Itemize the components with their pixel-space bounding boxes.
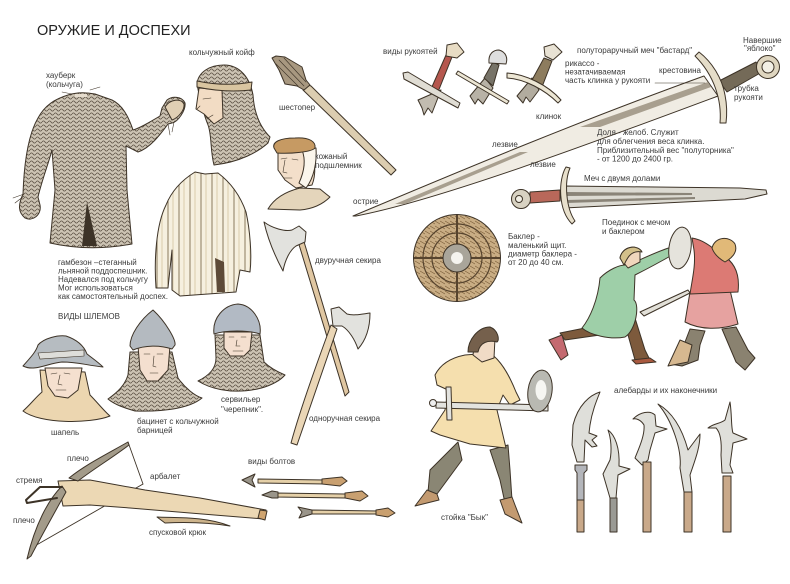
label: duel: и баклером <box>602 227 645 236</box>
heading: helmet types: ВИДЫ ШЛЕМОВ <box>58 312 120 321</box>
illustration: cervelliere with coif <box>198 304 285 391</box>
labels: bastard sword parts: полутораручный меч "бастард" <box>577 46 692 55</box>
illustration: bolts <box>242 474 395 518</box>
labels: bastard sword parts: "яблоко" <box>744 44 776 53</box>
labels: bastard sword parts: лезвие <box>492 140 518 149</box>
label: mail coif: кольчужный койф <box>189 48 255 57</box>
label: bolts: виды болтов <box>248 457 295 466</box>
label: bascinet <box>137 417 219 435</box>
title: ОРУЖИЕ И ДОСПЕХИ <box>37 23 191 39</box>
label: one-handed axe: одноручная секира <box>309 414 381 423</box>
label: bascinet: бацинет с кольчужной <box>137 417 219 426</box>
label: gambeson: Надевался под кольчугу <box>58 275 148 284</box>
illustration: crossbow <box>26 442 267 559</box>
label: halberds: алебарды и их наконечники <box>614 386 717 395</box>
label: gambeson: как самостоятельный доспех. <box>58 292 168 301</box>
illustration: hauberk mail shirt <box>13 87 185 248</box>
labels: crossbow parts: плечо <box>13 516 35 525</box>
illustration: Bull stance figure <box>415 327 555 523</box>
labels: bastard sword parts: острие <box>353 197 379 206</box>
labels: bastard sword parts: клинок <box>536 112 562 121</box>
illustration: bastard sword <box>353 52 780 216</box>
label: Bull stance: стойка "Бык" <box>441 513 488 522</box>
labels: crossbow parts <box>13 454 207 537</box>
text block: buckler <box>508 232 577 267</box>
label: duel: Поединок с мечом <box>602 218 670 227</box>
labels: bastard sword parts: крестовина <box>659 66 702 75</box>
labels: bastard sword parts: Навершие <box>743 36 782 45</box>
label: hilt types: виды рукоятей <box>383 47 438 56</box>
labels: bastard sword parts: трубка <box>734 84 759 93</box>
labels: bastard sword parts: незатачиваемая <box>565 68 625 76</box>
label: cervelliere: "черепник". <box>221 405 263 414</box>
illustration: flanged mace <box>272 56 396 175</box>
labels: crossbow parts: стремя <box>16 476 42 485</box>
label: hauberk: хауберк <box>46 71 76 80</box>
illustration: leather arming cap <box>268 138 330 210</box>
label: mace: шестопер <box>279 103 316 112</box>
text block: buckler: от 20 до 40 см. <box>508 258 563 267</box>
label: leather cap: кожаный <box>315 152 347 161</box>
labels: bastard sword parts: часть клинка у рукояти <box>565 76 650 85</box>
illustration: kettle hat <box>23 336 110 421</box>
text block: fuller description: - от 1200 до 2400 гр. <box>597 154 673 164</box>
text block: buckler: Баклер - <box>508 232 540 241</box>
illustration: bascinet with aventail <box>108 310 202 411</box>
illustration: mail coif <box>196 65 270 165</box>
label: kettle hat: шапель <box>51 428 79 437</box>
illustration: two-handed axe <box>264 222 349 396</box>
labels: bastard sword parts <box>353 36 782 206</box>
illustration: halberds <box>572 392 747 532</box>
label: duel <box>602 218 670 236</box>
labels: crossbow parts: арбалет <box>150 472 181 481</box>
labels: bastard sword parts: рукояти <box>734 93 763 102</box>
label: gambeson: гамбезон –стеганный <box>58 258 137 267</box>
label: cervelliere: сервильер <box>221 395 261 404</box>
label: leather cap: подшлемник <box>315 161 362 170</box>
labels: bastard sword parts: лезвие <box>530 160 556 169</box>
label: sword with two fullers: Меч с двумя долами <box>584 174 660 183</box>
labels: crossbow parts: плечо <box>67 454 89 463</box>
illustration: gambeson <box>155 172 251 296</box>
text block: buckler: диаметр баклера - <box>508 250 577 258</box>
label: two-handed axe: двуручная секира <box>315 256 381 265</box>
illustration: buckler <box>414 214 500 302</box>
text block: fuller description: для облегчения веса клинка. <box>597 137 704 146</box>
label: leather cap <box>315 152 362 170</box>
labels: bastard sword parts: рикассо - <box>565 59 600 68</box>
labels: crossbow parts: спусковой крюк <box>149 528 207 537</box>
text block: fuller description: Приблизительный вес "полуторника" <box>597 146 734 155</box>
text block: fuller description <box>597 128 734 164</box>
label: hauberk: (кольчуга) <box>46 80 83 89</box>
text block: buckler: маленький щит. <box>508 241 566 250</box>
label: gambeson <box>58 258 168 301</box>
label: gambeson: Мог использоваться <box>58 284 133 292</box>
label: cervelliere <box>221 395 263 414</box>
illustration: hilt types <box>403 43 562 115</box>
illustration: sword with two fullers <box>512 167 767 224</box>
text block: fuller description: Доля - желоб. Служит <box>597 128 679 137</box>
label: gambeson: льняной поддоспешник. <box>58 266 147 276</box>
illustration: one-handed axe <box>291 307 370 445</box>
label: hauberk <box>46 71 83 89</box>
label: bascinet: барницей <box>137 426 173 435</box>
illustration: sword and buckler duel <box>549 226 755 370</box>
